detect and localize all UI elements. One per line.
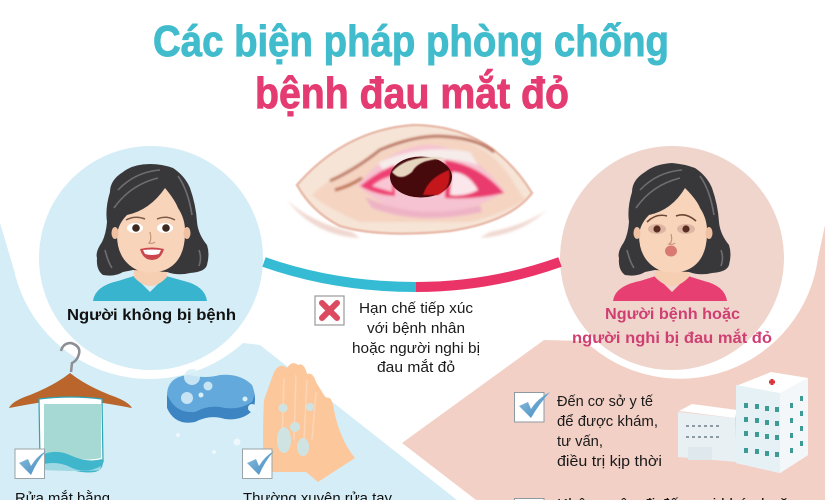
label: healthy person: Người không bị bệnh [67,307,236,324]
hair [619,163,730,276]
title: Các biện pháp phòng chống [153,17,669,66]
arc: pink connector [416,262,560,287]
icon: red eye illustration [287,125,547,238]
text: go to clinic [557,393,662,470]
face [117,188,185,272]
neck [655,262,689,286]
face [639,188,707,272]
label: sick person: Người bệnh hoặc [605,306,740,323]
healthy person [93,164,208,301]
label: sick person [572,306,772,347]
circle: healthy person background [39,146,263,370]
circle: sick person background [560,146,784,370]
label: sick person: người nghi bị đau mắt đỏ [572,329,772,347]
text: avoid contact [352,300,480,376]
text: go to clinic: Đến cơ sở y tế [557,393,654,410]
text: avoid contact: với bệnh nhân [367,320,465,337]
arc: teal connector [264,262,416,287]
icon: checkbox hands [242,449,274,478]
hair sheen [627,170,722,268]
neck [134,262,167,286]
icon: washing hands [263,363,355,482]
icon: checkbox bottom right [514,498,544,500]
shirt [93,276,207,301]
icon: hospital buildings [678,372,808,473]
text: avoid contact: hoặc người nghi bị [352,340,480,357]
icon: red cross box [315,296,344,325]
icon: checkbox towel [15,449,46,478]
icon: checkbox clinic [514,392,550,422]
title [153,17,669,118]
text: go to clinic: để được khám, [557,413,658,430]
text: avoid contact: đau mắt đỏ [377,359,455,376]
shirt [613,276,727,301]
sick person [613,163,730,301]
icon: sponge with bubbles [167,369,256,454]
title: bệnh đau mắt đỏ [255,68,569,118]
hair sheen [105,170,200,268]
icon: towel on hanger [9,343,132,472]
text: go to clinic: tư vấn, [557,433,603,450]
text: avoid contact: Hạn chế tiếp xúc [359,300,474,317]
text: go to clinic: điều trị kịp thời [557,453,662,470]
panel: blue background for healthy people [0,223,457,500]
hair [97,164,208,276]
panel: pink background for sick people [402,225,825,500]
